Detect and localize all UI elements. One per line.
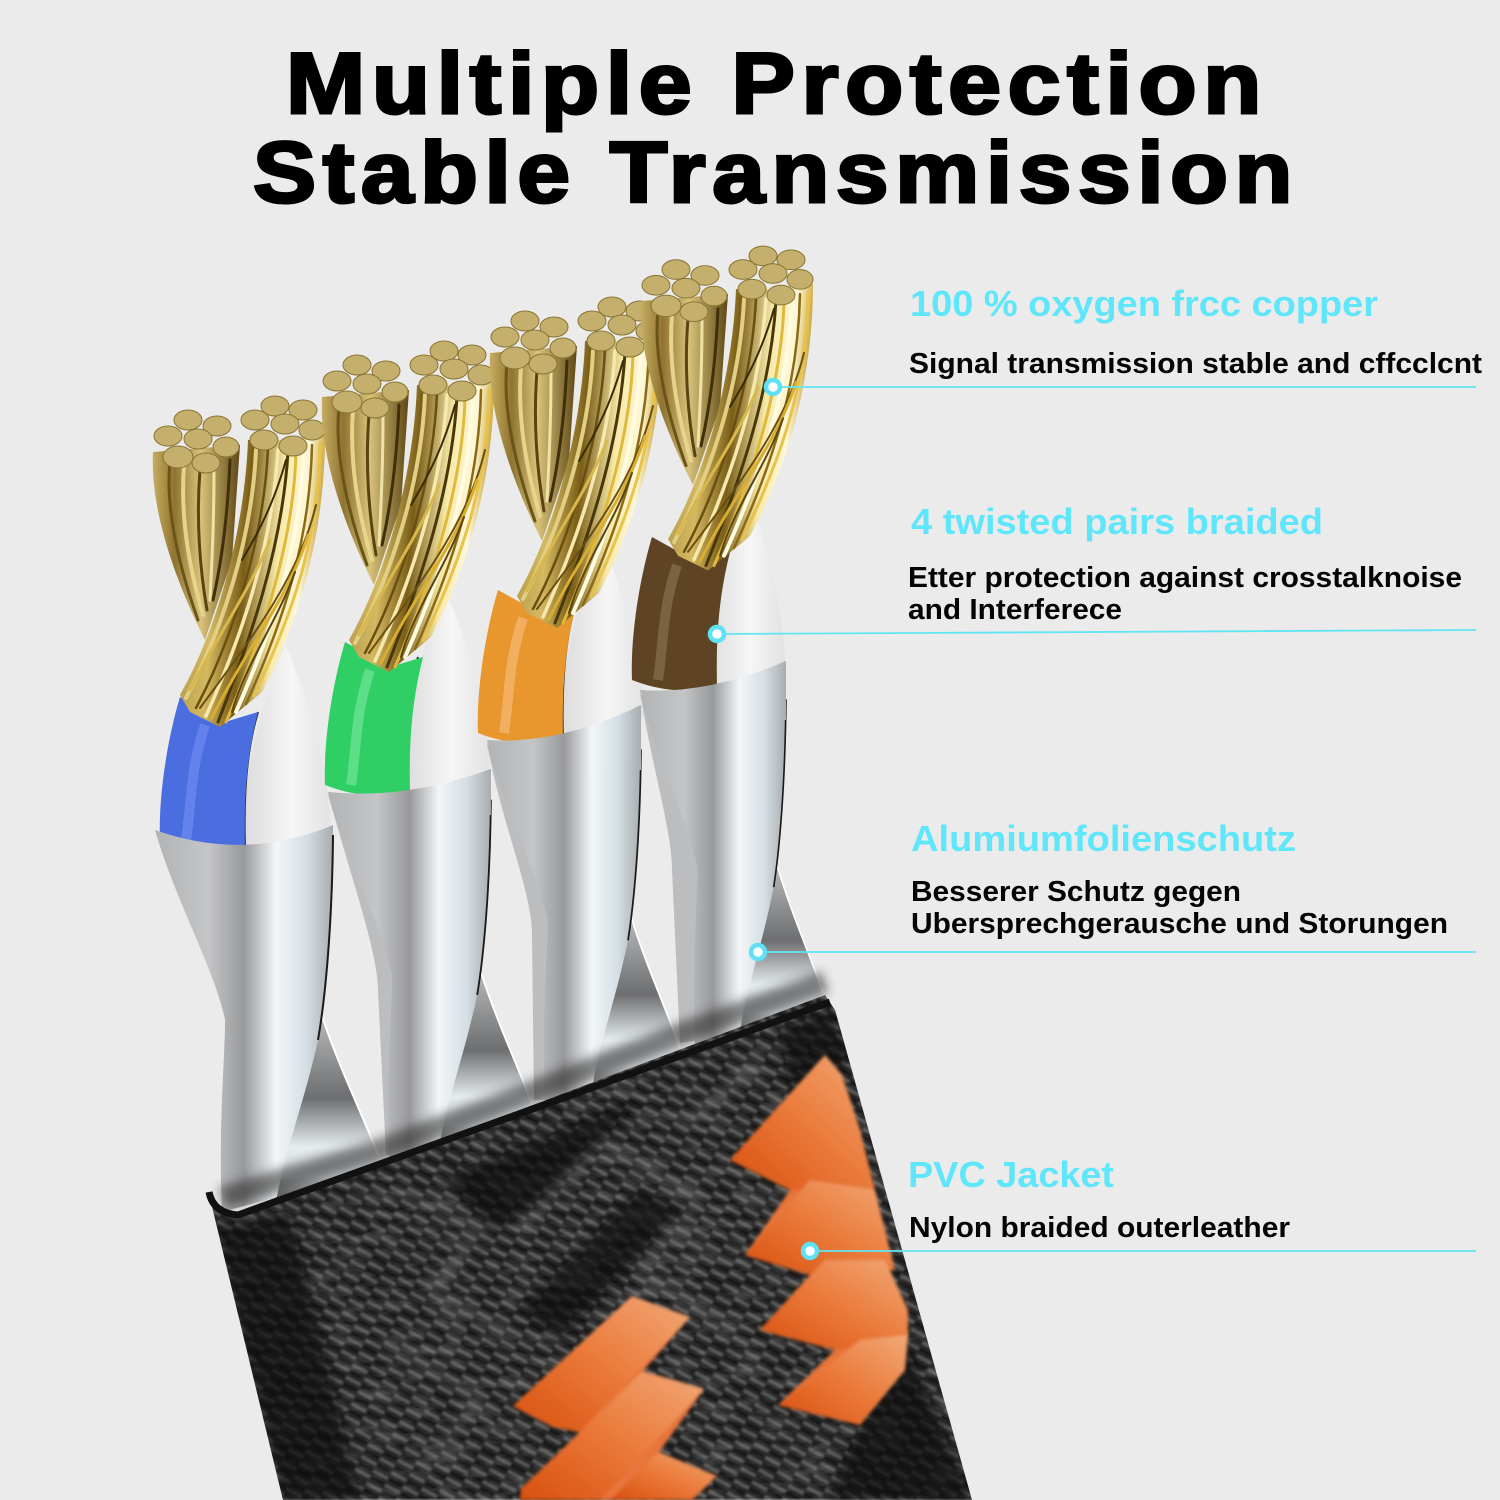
callout: copper xyxy=(766,283,1482,394)
title: Multiple Protection xyxy=(286,36,1268,132)
orange logo right xyxy=(730,1055,908,1425)
callout: copper: Signal transmission stable and cffcclcnt xyxy=(909,348,1482,380)
callout: foil: Besserer Schutz gegen xyxy=(911,876,1241,908)
callout: twisted pairs: and Interferece xyxy=(908,594,1122,626)
callout: foil: Alumiumfolienschutz xyxy=(911,818,1296,859)
callout: foil xyxy=(751,818,1476,959)
pair 3: orange wire xyxy=(478,297,680,1101)
callout: twisted pairs: Etter protection against crosstalknoise xyxy=(908,562,1462,594)
foil base shadow xyxy=(222,982,825,1198)
callout: copper: 100 % oxygen frcc copper xyxy=(910,283,1378,324)
callout: jacket xyxy=(803,1154,1476,1258)
pair 4: brown wire xyxy=(632,246,823,1045)
callout: foil: Ubersprechgerausche und Storungen xyxy=(911,908,1448,940)
orange logo left xyxy=(513,1296,717,1500)
callout: twisted pairs: 4 twisted pairs braided xyxy=(911,501,1323,542)
cable illustration xyxy=(153,246,980,1500)
callout: jacket: Nylon braided outerleather xyxy=(909,1212,1290,1244)
braided jacket xyxy=(205,990,980,1500)
pair 1: blue wire xyxy=(153,396,378,1212)
title xyxy=(253,36,1299,221)
callout: jacket: PVC Jacket xyxy=(908,1154,1114,1195)
title: Stable Transmission xyxy=(253,125,1299,221)
pair 2: green wire xyxy=(322,341,532,1159)
callout: twisted pairs xyxy=(710,501,1476,641)
jacket rim xyxy=(209,1002,830,1215)
